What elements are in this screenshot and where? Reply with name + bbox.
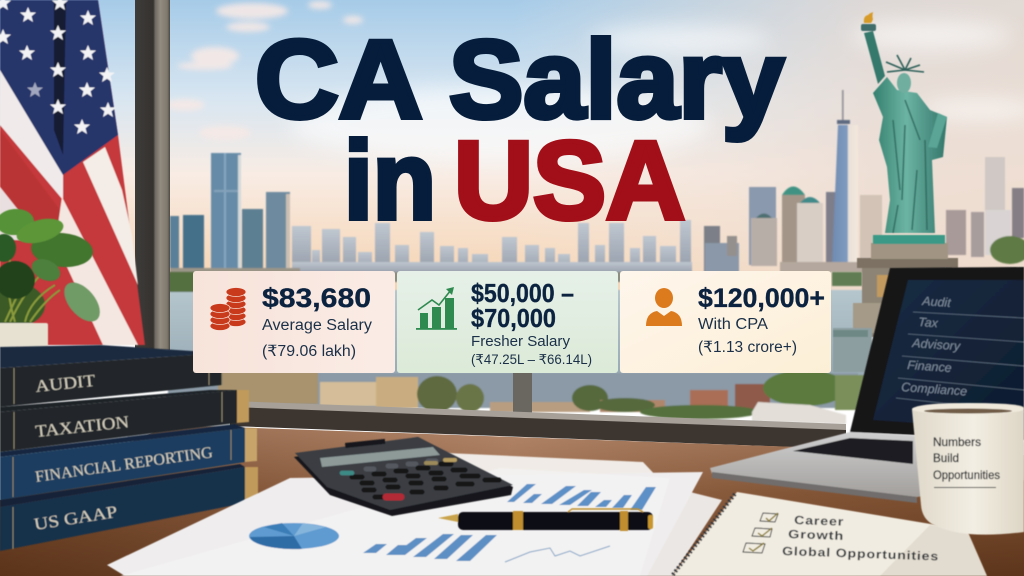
panel: fresher salary: [397, 271, 618, 373]
label: Fresher Salary: [471, 334, 571, 350]
checklist text: [782, 513, 939, 563]
pie chart: [249, 523, 339, 549]
panel: with CPA: [620, 271, 831, 373]
desk surface: [0, 425, 1024, 576]
label: With CPA: [698, 316, 769, 333]
value: $83,680: [262, 283, 371, 313]
pen: [438, 509, 653, 531]
screen menu text: Tax: [918, 315, 939, 330]
checklist text: Career: [794, 513, 844, 529]
title line 2: [344, 120, 685, 242]
icon: growth chart: [416, 287, 457, 330]
title line 2: in: [344, 120, 436, 242]
rupee amount: (₹79.06 lakh): [262, 343, 356, 360]
book title: Audit: AUDIT: [34, 371, 97, 396]
title: [255, 18, 784, 242]
book title: US GAAP: US GAAP: [33, 502, 119, 534]
screen menu text: Compliance: [901, 380, 968, 399]
panel: average salary: [193, 271, 395, 373]
checkbox items: [743, 513, 778, 553]
rupee amount: (₹47.25L – ₹66.14L): [471, 352, 592, 367]
background: sky with clouds: [0, 0, 1024, 300]
laptop: [710, 267, 1024, 503]
title line 1: CA: [255, 18, 422, 142]
window frame: [135, 0, 846, 449]
potted plant: [0, 207, 107, 349]
upper bar chart: [507, 484, 656, 510]
rupee amount: (₹1.13 crore+): [698, 339, 797, 356]
coffee mug: [912, 403, 1024, 535]
notebook checklist: [672, 492, 987, 576]
label: Average Salary: [262, 317, 372, 334]
title line 1: [255, 18, 784, 142]
screen menu text: Advisory: [911, 336, 961, 353]
checklist text: Growth: [788, 527, 844, 543]
icon: person: [646, 288, 682, 326]
stack of books: [0, 345, 258, 551]
screen menu text: [901, 294, 968, 399]
mug text: [933, 435, 1000, 482]
icon: coins: [210, 288, 246, 330]
financial papers with charts: [107, 453, 722, 576]
statue of liberty: [833, 12, 958, 372]
mug text: Numbers: [933, 435, 981, 449]
mug text: Build: [933, 451, 959, 465]
mug text: Opportunities: [933, 468, 1000, 482]
title line 1: Salary: [449, 18, 784, 142]
water and waterfront town: [168, 272, 868, 424]
checklist text: Global Opportunities: [782, 544, 939, 563]
panel: fresher salary: $70,000: [471, 303, 556, 333]
american flag: [0, 0, 145, 345]
book title: Financial Reporting: FINANCIAL REPORTING: [34, 444, 214, 486]
calculator: [294, 437, 513, 516]
screen menu text: Finance: [907, 358, 952, 375]
title line 2: USA: [454, 120, 685, 242]
lower bar chart: [363, 534, 497, 561]
book title: Taxation: TAXATION: [34, 412, 130, 441]
value: $50,000 –: [471, 278, 574, 308]
screen menu text: Audit: [921, 294, 952, 310]
value: $120,000+: [698, 283, 825, 313]
city skyline: [170, 90, 1024, 282]
